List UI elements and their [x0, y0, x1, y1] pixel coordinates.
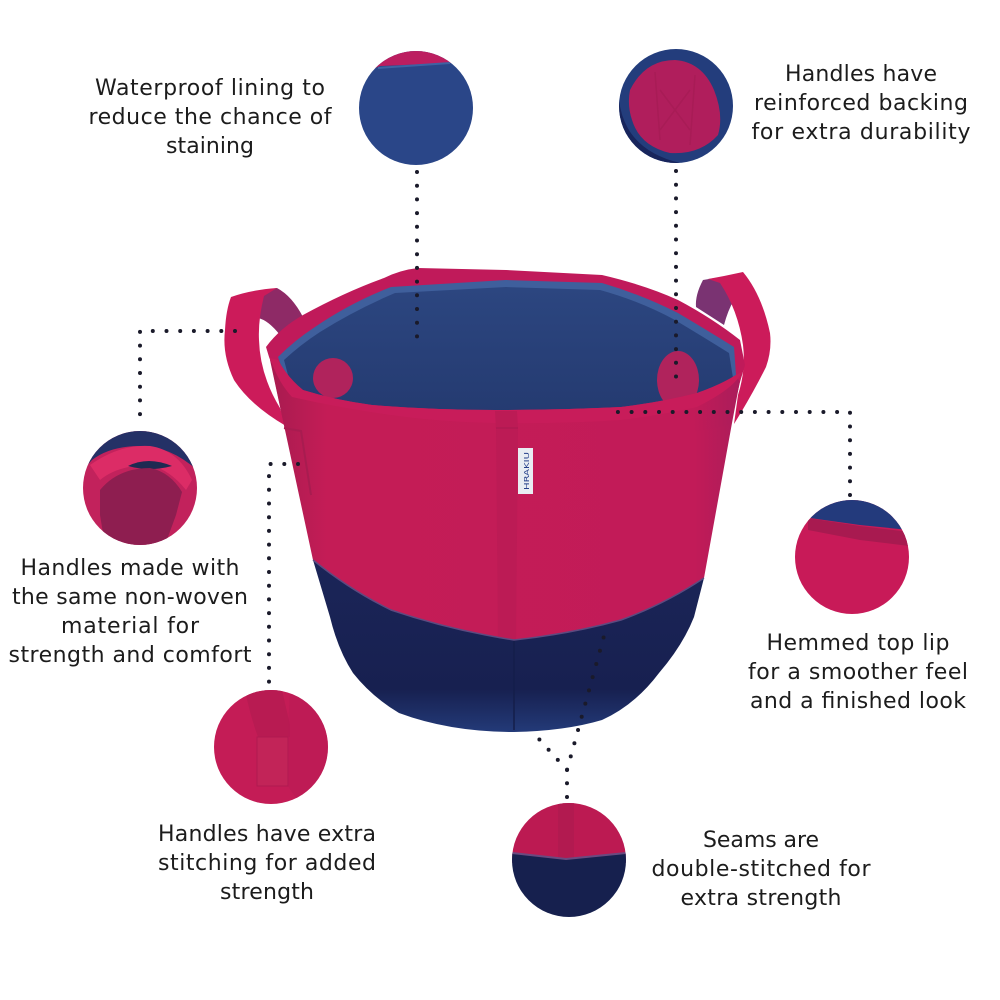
text: double-stitched seams: double-stitched for: [652, 857, 871, 882]
left handle: [224, 288, 303, 426]
text: handle stitching: stitching for added: [158, 851, 376, 876]
circle: handle material detail: [83, 431, 197, 545]
circle: waterproof lining detail: [359, 51, 473, 165]
front body over interior: [271, 360, 740, 470]
hemmed front rim: [270, 358, 742, 423]
circle: reinforced backing detail: [619, 49, 733, 163]
text: handle stitching: strength: [220, 880, 314, 905]
text: reinforced backing: for extra durability: [752, 120, 970, 145]
sewn brand label: HRAKIU: [523, 452, 531, 490]
text: handle stitching: [158, 822, 376, 905]
text: hemmed lip: [748, 631, 968, 714]
lower navy section: [313, 560, 704, 732]
colour join stitching: [313, 560, 704, 640]
right handle: [696, 272, 770, 424]
seam line on the navy section: [513, 640, 515, 730]
text: hemmed lip: for a smoother feel: [748, 660, 968, 685]
text: waterproof lining: reduce the chance of: [88, 105, 333, 130]
interior lining: [278, 280, 736, 420]
text: handle material: strength and comfort: [8, 643, 252, 668]
text: hemmed lip: and a finished look: [750, 689, 966, 714]
text: handle material: Handles made with: [20, 556, 240, 581]
text: handle material: material for: [61, 614, 200, 639]
text: waterproof lining: staining: [166, 134, 254, 159]
text: double-stitched seams: Seams are: [703, 828, 819, 853]
front seam strip: [495, 411, 518, 640]
text: hemmed lip: Hemmed top lip: [766, 631, 950, 656]
text: reinforced backing: Handles have: [785, 62, 937, 87]
text: waterproof lining: [88, 76, 333, 159]
side handle stitching: [284, 428, 311, 495]
rim back: [266, 268, 745, 420]
circle: hemmed lip detail: [795, 500, 909, 614]
sewn brand label: [518, 448, 533, 494]
text: reinforced backing: reinforced backing: [754, 91, 968, 116]
text: reinforced backing: [752, 62, 970, 145]
red upper body: [270, 360, 742, 640]
circle: double-stitched seam detail: [512, 803, 626, 917]
text: handle material: the same non-woven: [12, 585, 248, 610]
text: double-stitched seams: [652, 828, 871, 911]
fabric grow bag: [224, 268, 770, 732]
dotted leader lines: [140, 171, 850, 797]
text: waterproof lining: Waterproof lining to: [95, 76, 325, 101]
circle: handle stitching detail: [214, 690, 328, 804]
text: double-stitched seams: extra strength: [680, 886, 842, 911]
inside handle backing tabs: [313, 351, 699, 409]
text: handle material: [8, 556, 252, 668]
text: handle stitching: Handles have extra: [158, 822, 376, 847]
